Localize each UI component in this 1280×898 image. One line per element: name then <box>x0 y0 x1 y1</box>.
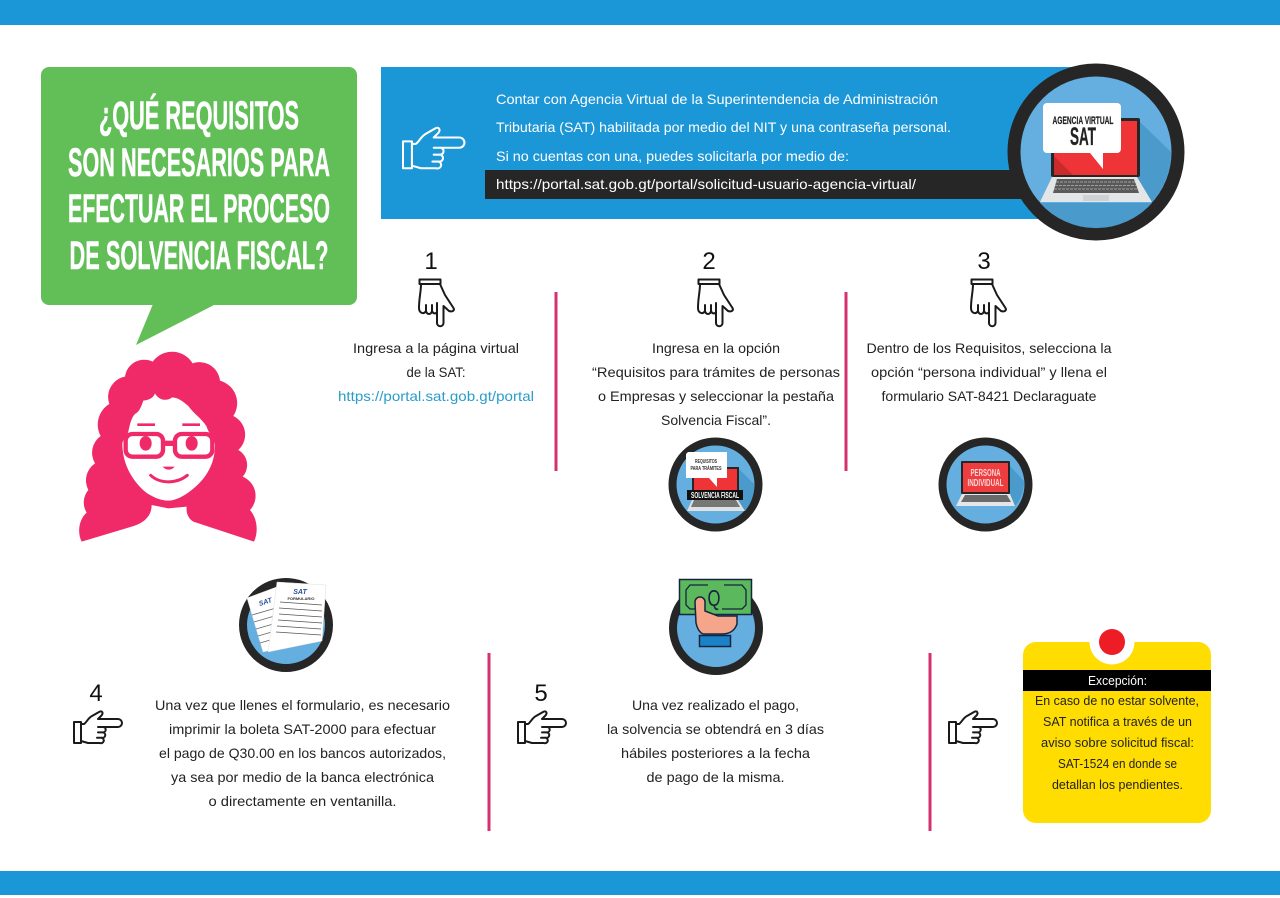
icon: hand with banknote: Q <box>708 585 720 611</box>
step 4 text <box>155 697 450 809</box>
step 5 <box>518 580 824 785</box>
icon: hand pointing down <box>971 280 1006 326</box>
step 5 text: la solvencia se obtendrá en 3 días <box>607 721 824 737</box>
step 2 text: o Empresas y seleccionar la pestaña <box>598 388 834 404</box>
url strip: https://portal.sat.gob.gt/portal/solicitud-usuario-agencia-virtual/ <box>496 176 916 192</box>
number 2: 2 <box>702 248 716 275</box>
step 3 text: formulario SAT-8421 Declaraguate <box>882 388 1097 404</box>
number 1: 1 <box>424 248 438 275</box>
number 4: 4 <box>89 680 103 707</box>
step 1 text: https://portal.sat.gob.gt/portal <box>338 388 534 404</box>
icon: documents SAT: FORMULARIO <box>287 596 315 601</box>
title <box>68 93 330 278</box>
icon: documents SAT: SAT <box>293 589 307 596</box>
step 2 text <box>592 340 840 428</box>
step 4 <box>74 582 450 809</box>
excepción text: aviso sobre solicitud fiscal: <box>1041 736 1194 750</box>
icon: laptop solvencia fiscal <box>672 442 758 528</box>
excepción text: En caso de no estar solvente, <box>1035 694 1199 708</box>
divider <box>488 653 490 831</box>
step 1 <box>338 248 534 404</box>
divider <box>554 292 558 471</box>
step 4 text: imprimir la boleta SAT-2000 para efectuar <box>169 721 436 737</box>
notch and red dot <box>1090 620 1134 664</box>
excepción text: SAT notifica a través de un <box>1043 715 1192 729</box>
step 4 text: ya sea por medio de la banca electrónica <box>171 769 434 785</box>
icon: hand pointing right <box>949 711 997 743</box>
requirement text <box>496 91 951 164</box>
icon: woman with curly hair and glasses <box>79 352 257 542</box>
icon: documents SAT: SAT <box>258 597 274 608</box>
excepción heading <box>1023 670 1211 691</box>
step 3 <box>866 248 1112 528</box>
icon: hand pointing down <box>698 280 733 326</box>
title: SON NECESARIOS PARA <box>68 141 330 185</box>
icon: laptop solvencia fiscal: PARA TRÁMITES <box>690 465 722 472</box>
step 5 text: de pago de la misma. <box>646 769 784 785</box>
requirement text: Contar con Agencia Virtual de la Superintendencia de Administración <box>496 91 938 107</box>
icon: documents SAT <box>243 582 329 668</box>
bottom bar <box>0 871 1280 895</box>
title speech bubble <box>41 67 357 345</box>
requirement text: Tributaria (SAT) habilitada por medio del NIT y una contraseña personal. <box>496 119 951 135</box>
title: DE SOLVENCIA FISCAL? <box>70 234 328 278</box>
icon: laptop persona individual: PERSONA <box>970 468 1000 479</box>
panel: excepción callout <box>1023 620 1211 823</box>
icon: hand pointing down <box>419 280 454 326</box>
step 1 text: Ingresa a la página virtual <box>353 340 519 356</box>
step 5 text <box>607 697 824 785</box>
step 2 text: Solvencia Fiscal”. <box>661 412 771 428</box>
panel: requisito agencia virtual <box>381 67 1081 219</box>
excepción text: SAT-1524 en donde se <box>1058 757 1177 771</box>
step 5 text: Una vez realizado el pago, <box>632 697 799 713</box>
step 1 text <box>338 340 534 404</box>
step 3 text: Dentro de los Requisitos, selecciona la <box>866 340 1112 356</box>
step 1 text: de la SAT: <box>406 364 466 380</box>
excepción text <box>1035 694 1199 792</box>
icon: pointing hand white <box>403 128 464 168</box>
excepción text: detallan los pendientes. <box>1052 778 1183 792</box>
step 3 text <box>866 340 1112 404</box>
icon: laptop agencia virtual SAT: AGENCIA VIRTUAL <box>1052 115 1114 127</box>
icon: laptop agencia virtual SAT <box>1014 70 1178 234</box>
step 4 text: o directamente en ventanilla. <box>208 793 396 809</box>
icon: laptop agencia virtual SAT: SAT <box>1070 123 1096 151</box>
requirement text: Si no cuentas con una, puedes solicitarla por medio de: <box>496 148 849 164</box>
step 2 text: Ingresa en la opción <box>652 340 780 356</box>
title: EFECTUAR EL PROCESO <box>68 187 330 231</box>
step 2 <box>592 248 840 528</box>
divider <box>844 292 848 471</box>
excepción heading: Excepción: <box>1088 673 1147 688</box>
number 5: 5 <box>534 680 548 707</box>
number 3: 3 <box>977 248 991 275</box>
icon: laptop persona individual: INDIVIDUAL <box>968 478 1004 489</box>
icon: hand pointing right <box>74 711 122 743</box>
step 5 text: hábiles posteriores a la fecha <box>621 745 810 761</box>
step 3 text: opción “persona individual” y llena el <box>871 364 1107 380</box>
step 4 text: el pago de Q30.00 en los bancos autorizados, <box>159 745 446 761</box>
url strip <box>485 170 1025 199</box>
icon: laptop persona individual <box>942 442 1028 528</box>
step 4 text: Una vez que llenes el formulario, es necesario <box>155 697 450 713</box>
icon: hand pointing right <box>518 711 566 743</box>
divider <box>928 653 932 831</box>
icon: laptop solvencia fiscal: REQUISITOS <box>695 459 717 465</box>
title: ¿QUÉ REQUISITOS <box>99 93 299 138</box>
icon: hand with banknote <box>673 580 759 671</box>
step 2 text: “Requisitos para trámites de personas <box>592 364 840 380</box>
icon: laptop solvencia fiscal: SOLVENCIA FISCAL <box>691 491 739 500</box>
top bar <box>0 0 1280 25</box>
